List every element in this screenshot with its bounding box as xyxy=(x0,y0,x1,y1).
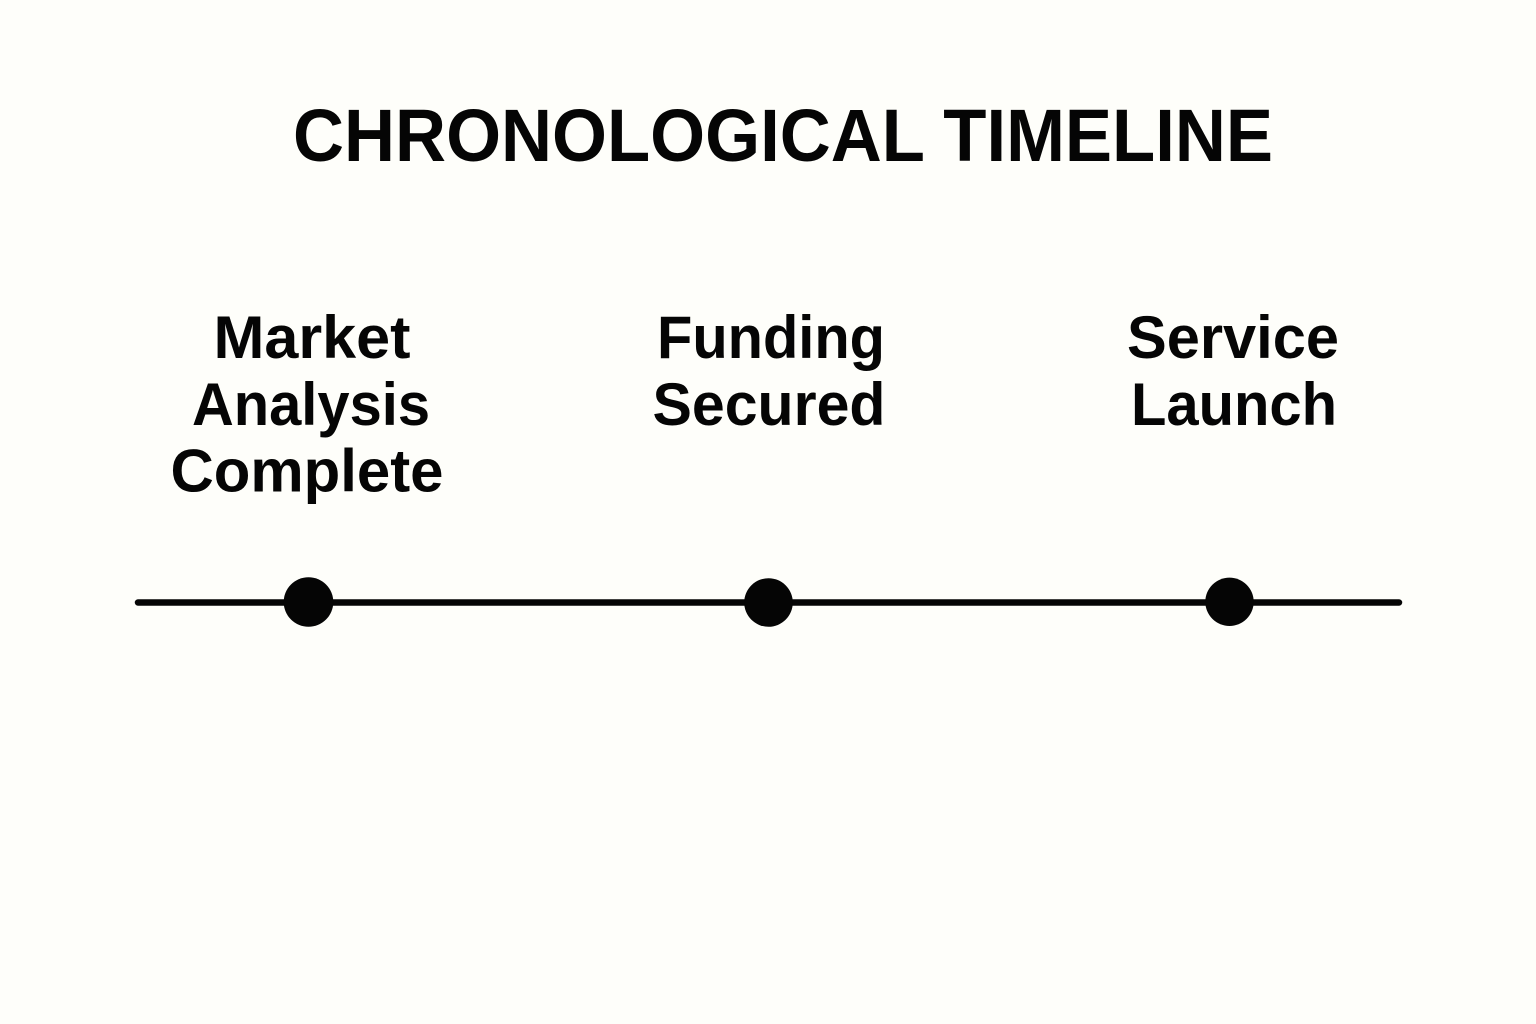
milestone label: Market Analysis Complete xyxy=(170,304,444,504)
marker: Funding Secured xyxy=(744,578,793,627)
timeline axis xyxy=(138,599,1399,606)
milestone label: Market Analysis Complete: Analysis xyxy=(192,371,430,438)
milestone label: Funding Secured: Secured xyxy=(652,371,886,438)
milestone label: Market Analysis Complete: Market xyxy=(214,304,411,371)
milestone label: Funding Secured xyxy=(652,304,886,438)
milestone label: Funding Secured: Funding xyxy=(657,304,885,371)
marker: Market Analysis Complete xyxy=(284,577,333,627)
milestone label: Market Analysis Complete: Complete xyxy=(170,438,444,504)
milestone label: Service Launch: Service xyxy=(1127,304,1339,371)
milestone label: Service Launch: Launch xyxy=(1131,371,1337,438)
milestone label: Service Launch xyxy=(1127,304,1339,438)
marker: Service Launch xyxy=(1205,578,1254,626)
title: CHRONOLOGICAL TIMELINE xyxy=(293,94,1273,177)
